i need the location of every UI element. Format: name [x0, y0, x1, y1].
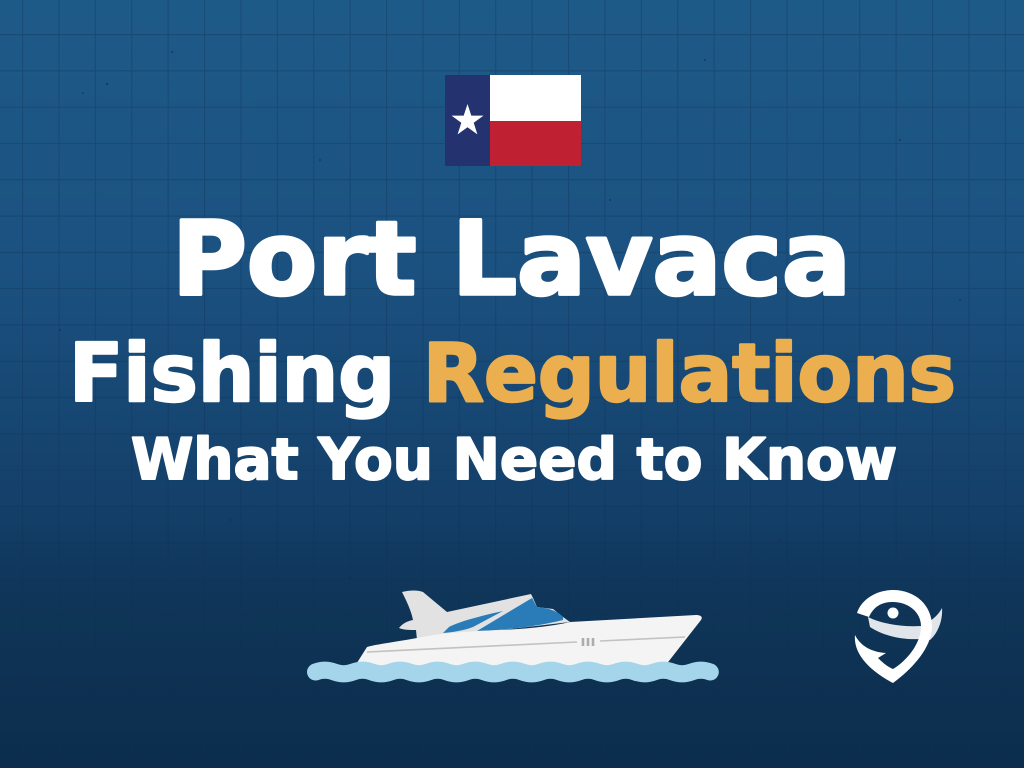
- boat windshield: [477, 598, 563, 631]
- icon: fish hook logo: [855, 590, 942, 683]
- boat side window: [443, 611, 503, 633]
- icon: motor yacht on water: [316, 590, 710, 674]
- water waves: [316, 670, 710, 674]
- hull vents: [583, 638, 593, 646]
- heading: Fishing Regulations: Fishing Regulations: [69, 327, 956, 420]
- boat hull: [355, 615, 702, 666]
- logo body: [855, 590, 932, 683]
- hull stripe: [367, 637, 685, 652]
- icon: Texas flag: [445, 75, 581, 166]
- boat superstructure: [399, 590, 570, 640]
- subheading: What You Need to Know: What You Need to Know: [131, 427, 897, 493]
- title: Port Lavaca: Port Lavaca: [172, 200, 851, 319]
- logo eye: [888, 608, 898, 618]
- logo tail and band: [868, 608, 942, 640]
